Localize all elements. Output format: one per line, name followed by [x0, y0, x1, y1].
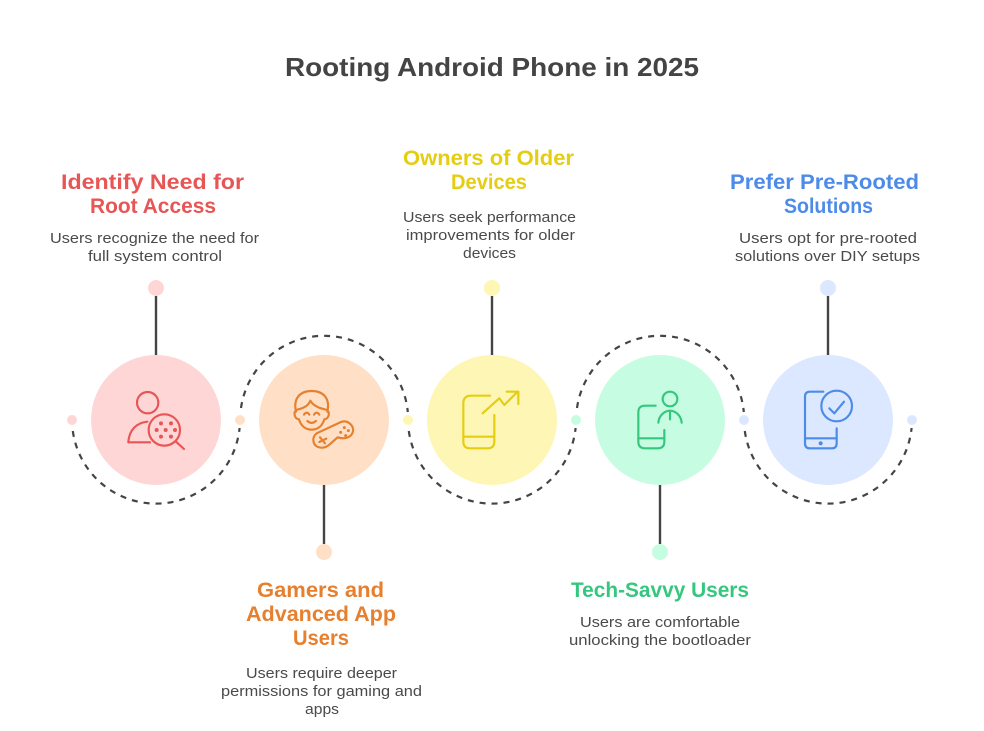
icon: person with magnifier: [128, 392, 184, 449]
dashed connector path: [73, 336, 912, 504]
description: identify need: [50, 230, 259, 265]
panel: prefer pre-rooted solutions: [730, 171, 920, 485]
heading: pre-rooted: Prefer Pre-Rooted: [730, 171, 919, 194]
circle: [763, 355, 893, 485]
marker dot: top: [148, 280, 164, 296]
marker dot: bottom: [316, 544, 332, 560]
small dot: [403, 415, 413, 425]
title: Rooting Android Phone in 2025: [285, 52, 699, 82]
heading: owners: Devices: [451, 171, 527, 194]
description: owners: Users seek performance: [403, 209, 576, 226]
stem line: [155, 296, 157, 355]
small dot: [739, 415, 749, 425]
stem line: [323, 485, 325, 544]
circle: [91, 355, 221, 485]
circle: [259, 355, 389, 485]
small dot: [67, 415, 77, 425]
marker dot: bottom: [652, 544, 668, 560]
heading: pre-rooted: [730, 171, 919, 218]
stem line: [491, 296, 493, 355]
small dot: [235, 415, 245, 425]
icon: phone with check mark: [805, 391, 852, 448]
connector end dot: [907, 415, 917, 425]
icon: phone with user: [638, 392, 682, 448]
heading: tech-savvy: Tech-Savvy Users: [571, 579, 749, 602]
small dot: [571, 415, 581, 425]
description: owners: devices: [463, 245, 516, 262]
icon: boy with game controller: [295, 391, 353, 448]
description: identify need: Users recognize the need for: [50, 230, 259, 247]
description: owners: improvements for older: [406, 227, 575, 244]
circle: [427, 355, 557, 485]
description: tech-savvy: [569, 614, 751, 649]
stem line: [827, 296, 829, 355]
description: gamers: Users require deeper: [246, 665, 397, 682]
circle: [595, 355, 725, 485]
marker dot: top: [484, 280, 500, 296]
heading: gamers: Advanced App: [246, 603, 396, 626]
heading: identify need: [61, 171, 244, 218]
description: owners: [403, 209, 576, 262]
panel: tech-savvy users: [569, 355, 751, 649]
description: identify need: full system control: [88, 248, 222, 265]
heading: gamers: Users: [293, 627, 349, 650]
panel: identify need for root access: [50, 171, 259, 485]
heading: gamers: [246, 579, 396, 650]
description: pre-rooted: solutions over DIY setups: [735, 248, 920, 265]
heading: owners: Owners of Older: [403, 147, 574, 170]
heading: owners: [403, 147, 574, 194]
icon: phone with rising arrow: [463, 392, 518, 448]
heading: pre-rooted: Solutions: [784, 195, 873, 218]
description: gamers: apps: [305, 701, 339, 718]
description: gamers: [221, 665, 422, 718]
description: gamers: permissions for gaming and: [221, 683, 422, 700]
description: tech-savvy: Users are comfortable: [580, 614, 740, 631]
panel: owners of older devices: [403, 147, 576, 485]
description: pre-rooted: Users opt for pre-rooted: [739, 230, 917, 247]
panel: gamers and advanced app users: [221, 355, 422, 718]
description: tech-savvy: unlocking the bootloader: [569, 632, 751, 649]
marker dot: top: [820, 280, 836, 296]
heading: gamers: Gamers and: [257, 579, 384, 602]
description: pre-rooted: [735, 230, 920, 265]
heading: identify need: Root Access: [90, 195, 216, 218]
heading: identify need: Identify Need for: [61, 171, 244, 194]
stem line: [659, 485, 661, 544]
